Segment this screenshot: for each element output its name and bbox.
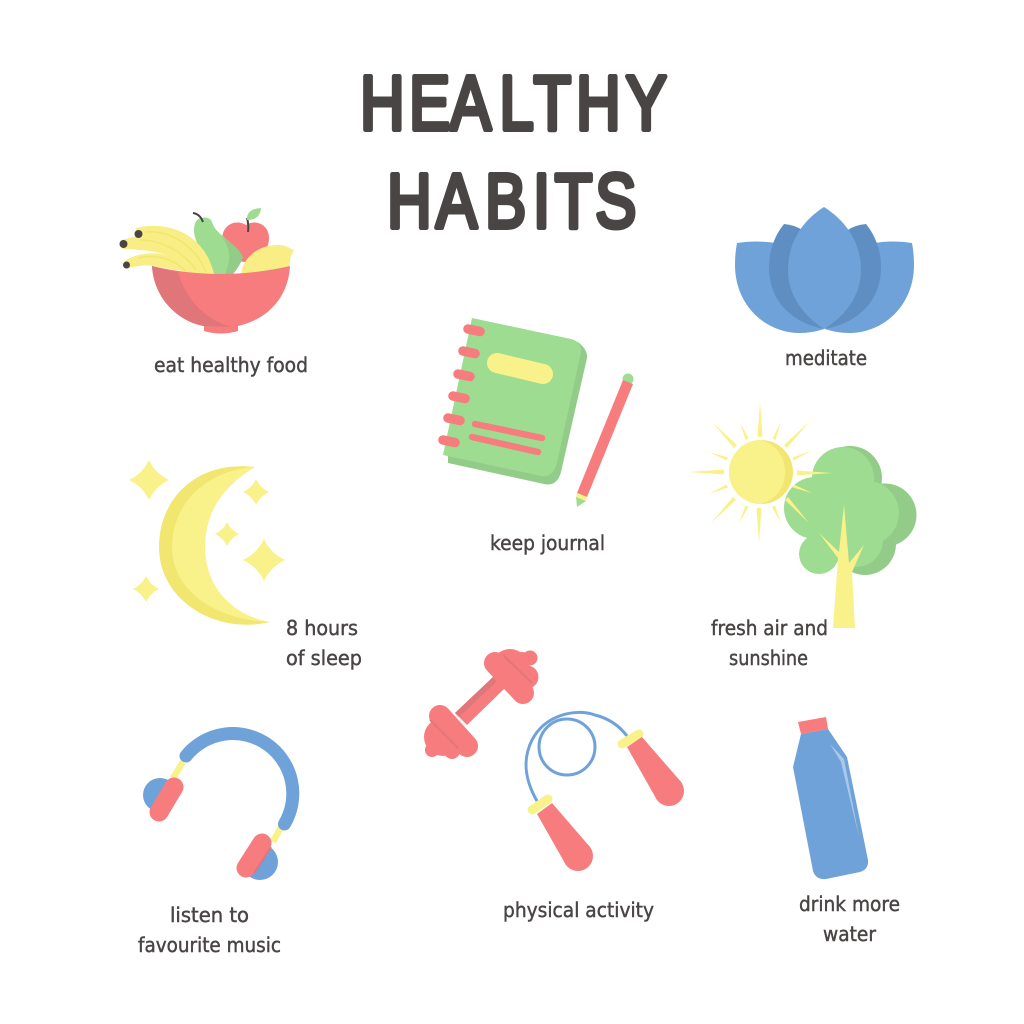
label: eat healthy food: eat healthy food [154,353,308,377]
pear [193,213,243,274]
panel: meditate [735,207,914,370]
icon: headphones [143,734,293,880]
label: listen to favourite music: favourite music [138,933,281,957]
panel: listen to favourite music [138,734,293,957]
label: keep journal: keep journal [490,531,605,555]
label: listen to favourite music: listen to [170,903,249,927]
icon: tree [784,446,916,628]
label: 8 hours of sleep [286,616,362,670]
icon: moon and stars [129,460,285,625]
panel: fresh air and sunshine [689,402,916,670]
apple [222,208,269,262]
panel: sleep [129,460,362,670]
icon: sun [689,402,832,543]
panel: eat healthy food [120,208,308,377]
label: fresh air and sunshine: fresh air and [711,616,828,640]
icon: skipping rope [526,712,684,871]
title: HEALTHY [360,60,667,146]
bowl [152,266,290,334]
label: meditate: meditate [785,346,867,370]
label: drink more water: water [823,922,877,946]
bananas [120,226,214,274]
icon: pencil [576,374,634,507]
icon: water bottle [793,717,868,879]
lemon [241,245,294,274]
panel: keep journal [443,318,634,555]
label: 8 hours of sleep: of sleep [286,646,362,670]
label: 8 hours of sleep: 8 hours [286,616,358,640]
title [360,60,667,244]
icon: lotus [735,207,914,333]
label: fresh air and sunshine [711,616,828,670]
label: drink more water [799,892,900,946]
panel: physical activity [424,649,684,922]
label: listen to favourite music [138,903,281,957]
icon: fruit bowl [120,208,294,334]
title: HABITS [387,158,636,244]
label: drink more water: drink more [799,892,900,916]
panel: drink more water [793,717,900,946]
label: physical activity: physical activity [503,898,654,922]
label: fresh air and sunshine: sunshine [729,646,808,670]
icon: notebook [443,318,587,484]
icon: dumbbell [424,649,538,759]
